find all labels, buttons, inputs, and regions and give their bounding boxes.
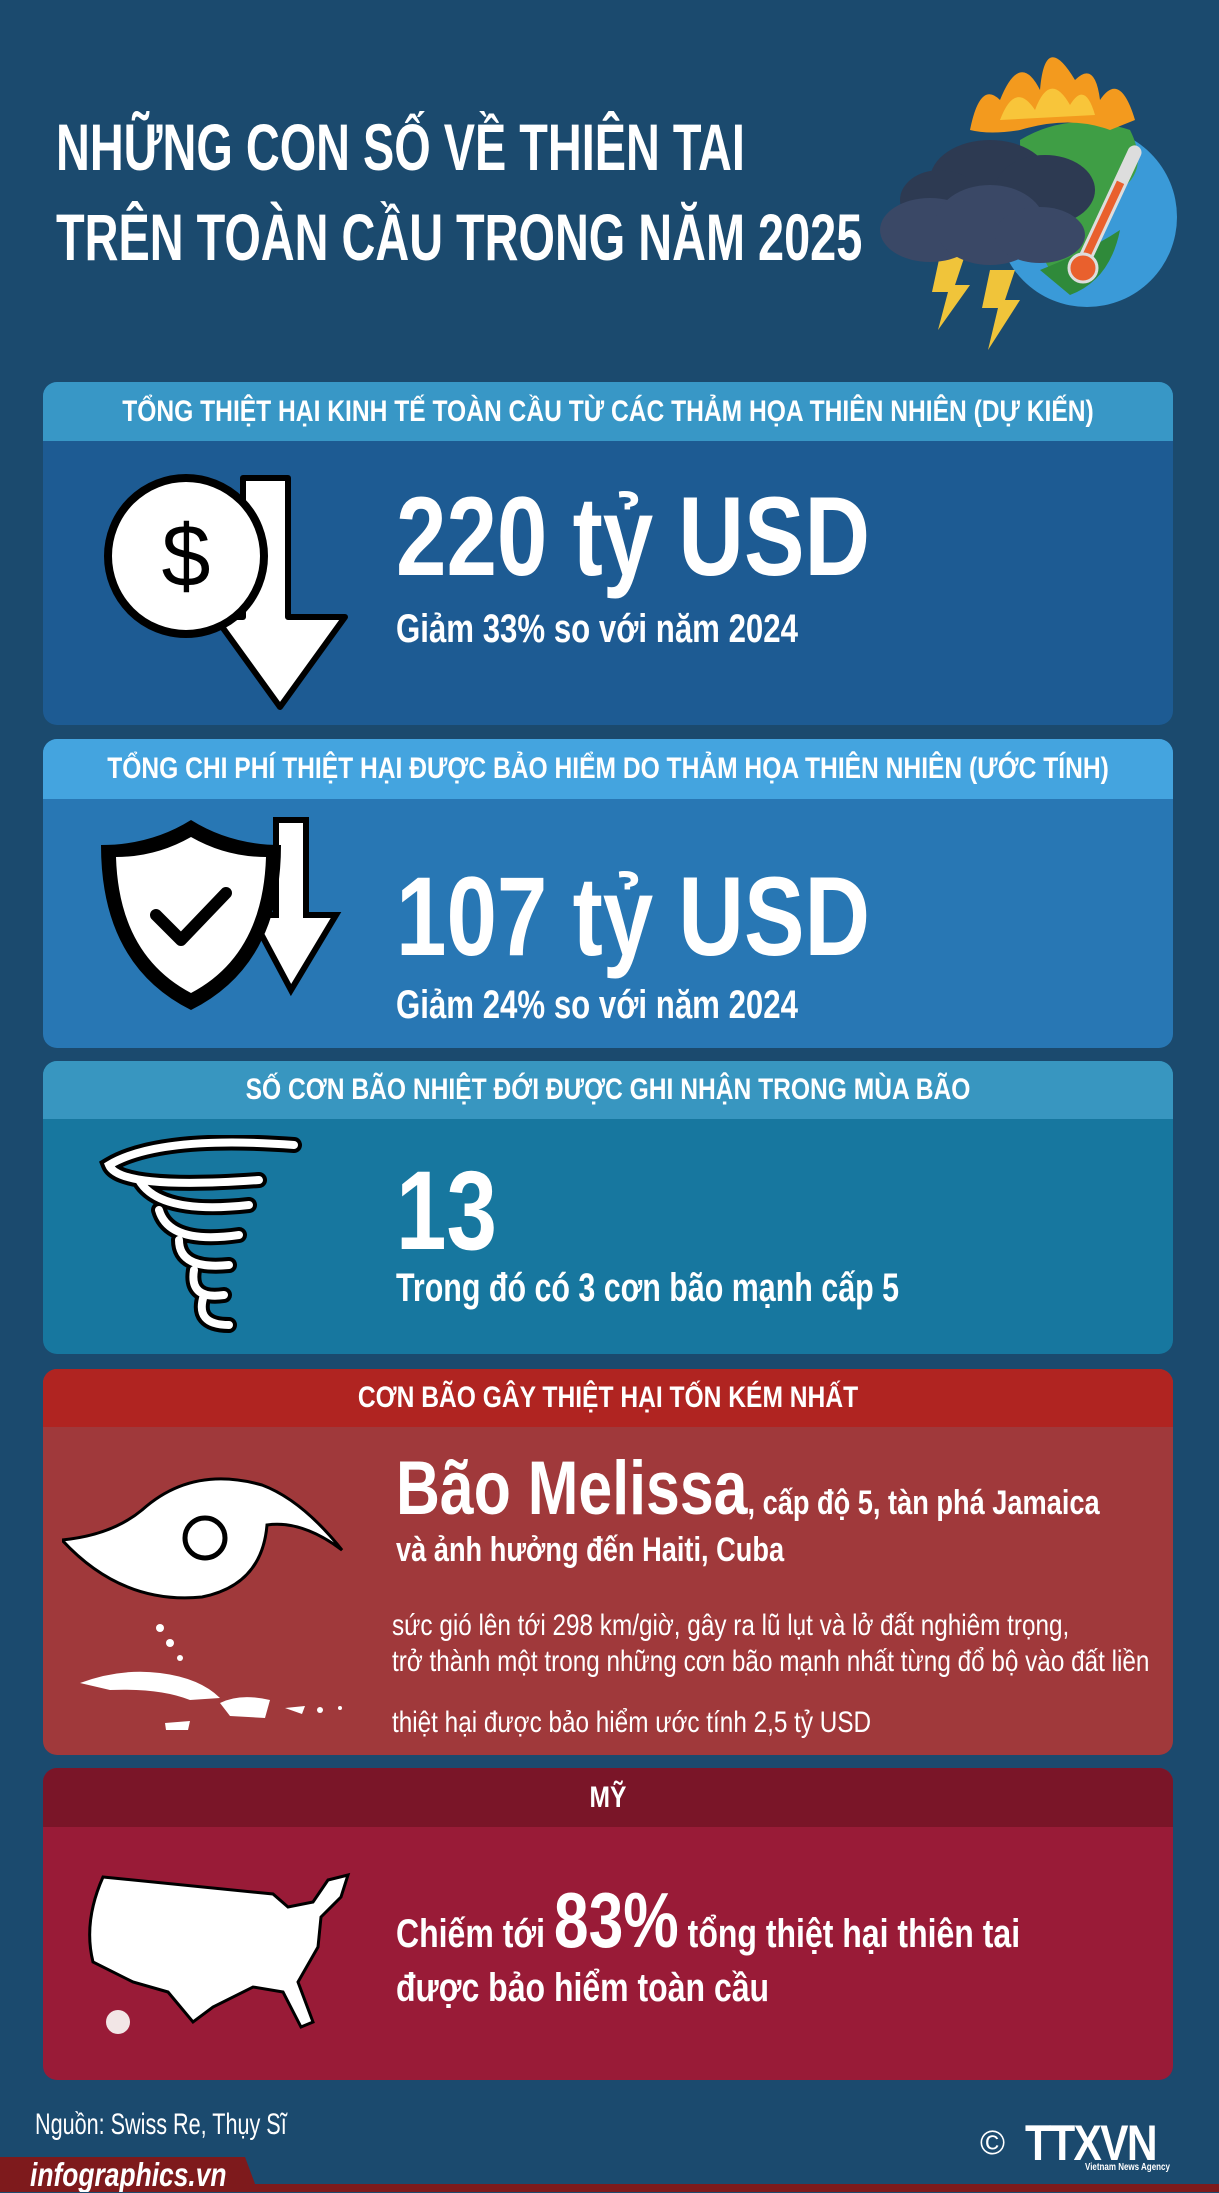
footer tab: website: infographics.vn: [30, 2156, 227, 2193]
panel header: [43, 1768, 1173, 1827]
icon: hurricane: [62, 1477, 344, 1600]
logo: TTXVN: TTXVN: [1025, 2115, 1156, 2171]
storm details: [392, 1609, 1149, 1678]
footer band: [0, 2184, 1219, 2192]
title: TRÊN TOÀN CẦU TRONG NĂM 2025: [56, 200, 862, 274]
icon: dollar down arrow: $: [162, 506, 210, 605]
insured loss note: thiệt hại được bảo hiểm ước tính 2,5 tỷ USD: [392, 1706, 871, 1739]
storm name: Bão Melissa, cấp độ 5, tàn phá Jamaica: [396, 1446, 1100, 1531]
panel: economic losses: [43, 382, 1173, 725]
logo: TTXVN: [980, 2115, 1170, 2173]
panel header: [43, 382, 1173, 441]
panel: costliest storm: [43, 1369, 1173, 1755]
big number: 220 tỷ USD: [396, 474, 870, 599]
icon: caribbean islands: [80, 1624, 342, 1730]
storm details: trở thành một trong những cơn bão mạnh nhất từng đổ bộ vào đất liền: [392, 1645, 1149, 1678]
icon: dollar down arrow: [104, 474, 348, 710]
panel: insured losses: [43, 739, 1173, 1048]
panel header: SỐ CƠN BÃO NHIỆT ĐỚI ĐƯỢC GHI NHẬN TRONG MÙA BÃO: [246, 1073, 970, 1106]
subtext: Giảm 33% so với năm 2024: [396, 607, 798, 651]
panel header: [43, 1061, 1173, 1119]
logo: TTXVN: Vietnam News Agency: [1085, 2162, 1170, 2173]
subtext: Trong đó có 3 cơn bão mạnh cấp 5: [396, 1266, 899, 1310]
panel header: MỸ: [590, 1781, 626, 1814]
icon: tornado: [99, 1135, 302, 1333]
icon: US map: [88, 1872, 350, 2034]
panel: USA: [43, 1768, 1173, 2080]
logo: TTXVN: ©: [980, 2124, 1005, 2162]
stat text: Chiếm tới 83% tổng thiệt hại thiên tai: [396, 1876, 1020, 1964]
stat subline: được bảo hiểm toàn cầu: [396, 1966, 769, 2010]
icon: globe with fire, clouds, thermometer: [880, 57, 1177, 350]
panel: tropical storms: [43, 1061, 1173, 1354]
panel header: [43, 1369, 1173, 1427]
big number: 13: [396, 1148, 497, 1273]
big number: 107 tỷ USD: [396, 854, 870, 979]
panel header: TỔNG THIỆT HẠI KINH TẾ TOÀN CẦU TỪ CÁC THẢM HỌA THIÊN NHIÊN (DỰ KIẾN): [122, 395, 1094, 428]
panel header: CƠN BÃO GÂY THIỆT HẠI TỐN KÉM NHẤT: [358, 1381, 858, 1414]
title: NHỮNG CON SỐ VỀ THIÊN TAI: [56, 110, 745, 184]
subtext: Giảm 24% so với năm 2024: [396, 983, 798, 1027]
title: [56, 110, 862, 274]
panel header: TỔNG CHI PHÍ THIỆT HẠI ĐƯỢC BẢO HIỂM DO THẢM HỌA THIÊN NHIÊN (ƯỚC TÍNH): [107, 752, 1109, 785]
icon: shield down arrow: [101, 817, 342, 1010]
source: Nguồn: Swiss Re, Thụy Sĩ: [35, 2108, 287, 2141]
panel header: [43, 739, 1173, 799]
storm details: sức gió lên tới 298 km/giờ, gây ra lũ lụt và lở đất nghiêm trọng,: [392, 1609, 1069, 1642]
storm subline: và ảnh hưởng đến Haiti, Cuba: [396, 1531, 784, 1569]
